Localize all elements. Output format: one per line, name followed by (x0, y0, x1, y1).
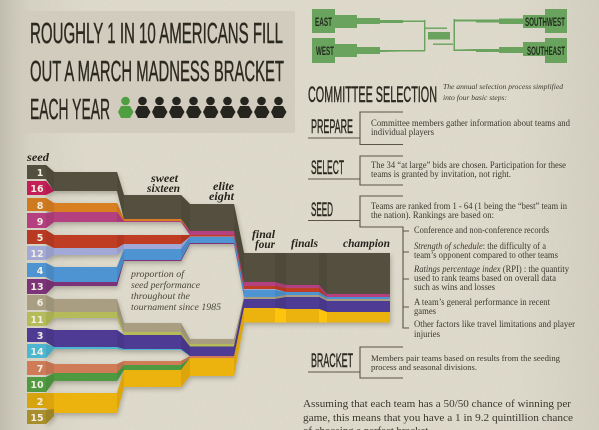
seed boxes: 14 (30, 347, 44, 358)
step: select (308, 156, 566, 185)
bracket diagram (312, 9, 567, 63)
seed boxes: 16 (30, 184, 44, 195)
round labels: four (255, 239, 276, 251)
icon row: 1 in 10 people (118, 97, 286, 118)
intro text: The annual selection process simplified (443, 82, 563, 91)
seed boxes: 2 (37, 397, 43, 408)
round labels: eight (209, 191, 235, 203)
intro text: into four basic steps: (443, 93, 507, 102)
ranking criteria list: Conference and non-conference records (414, 225, 549, 235)
ranking criteria list: injuries (414, 329, 440, 339)
seed boxes: 3 (37, 331, 43, 342)
east arm (312, 9, 425, 33)
round labels (26, 152, 390, 251)
step: seed (308, 196, 575, 339)
seed boxes: 7 (37, 364, 43, 375)
step: seed: Teams are ranked from 1 - 64 (1 being the “best” team in (371, 201, 567, 211)
ranking criteria list: Strength of schedule: the difficulty of a (414, 241, 546, 251)
seed boxes: 11 (30, 315, 44, 326)
closing statement: Assuming that each team has a 50/50 chance of winning per (303, 398, 571, 410)
step: prepare: Committee members gather information about teams and (371, 118, 570, 128)
ranking criteria list: such as wins and losses (414, 282, 495, 292)
seed boxes: 6 (37, 298, 44, 309)
chart caption: tournament since 1985 (131, 303, 221, 313)
connectors and center (424, 19, 455, 51)
chart caption: proportion of (130, 269, 185, 280)
round labels: finals (291, 238, 319, 250)
west arm (312, 38, 425, 63)
region labels (315, 17, 565, 58)
chart caption (130, 269, 221, 313)
chart caption: seed performance (131, 280, 200, 291)
ranking criteria list: used to rank teams based on overall data (414, 273, 556, 283)
intro text (443, 82, 563, 102)
seed boxes: 4 (37, 266, 44, 277)
title text: EACH YEAR (30, 94, 110, 126)
seed boxes: 1 (37, 168, 43, 179)
region labels: EAST (315, 17, 332, 29)
seed boxes: 13 (30, 282, 44, 293)
closing statement (303, 398, 573, 430)
fold shading (46, 165, 327, 424)
round labels: elite (213, 181, 234, 193)
round labels: final (252, 229, 276, 241)
seed boxes: 10 (30, 380, 44, 391)
step: bracket: BRACKET (311, 350, 353, 372)
step: select: SELECT (311, 157, 344, 179)
ranking criteria list: games (414, 306, 436, 316)
round labels: seed (26, 152, 49, 164)
step: prepare: individual players (371, 127, 434, 137)
region labels: SOUTHWEST (525, 17, 565, 29)
flow bands (46, 165, 390, 424)
ranking criteria list: Other factors like travel limitations and player (414, 319, 575, 329)
gold highlight folds (275, 308, 327, 322)
ranking criteria list: A team’s general performance in recent (414, 297, 550, 307)
step: prepare (308, 112, 570, 144)
round labels: sixteen (146, 183, 180, 195)
seed boxes: 8 (37, 201, 44, 212)
text: COMMITTEE SELECTION (308, 82, 437, 107)
step: select: teams is granted by invitation, not right. (371, 169, 511, 179)
southwest arm (454, 9, 567, 33)
title text: ROUGHLY 1 IN 10 AMERICANS FILL (30, 18, 283, 50)
southeast arm (454, 38, 567, 63)
closing statement: game, this means that you have a 1 in 9.2 quintillion chance (303, 412, 573, 424)
region labels: SOUTHEAST (527, 46, 565, 58)
panel: title (22, 11, 295, 133)
step: seed: SEED (311, 199, 333, 221)
chart: seed performance flow (26, 152, 390, 424)
step: prepare: PREPARE (311, 116, 353, 138)
step: bracket: process and seasonal divisions. (371, 363, 477, 372)
step: seed: the nation). Rankings are based on: (371, 210, 494, 220)
ranking criteria list: Ratings percentage index (RPI) : the quantity (413, 264, 569, 274)
seed boxes: 12 (30, 249, 44, 260)
ranking criteria list: team’s opponent compared to other teams (414, 250, 558, 260)
step: bracket: Members pair teams based on results from the seeding (371, 354, 561, 363)
step: bracket (308, 347, 561, 378)
round labels: sweet (150, 173, 179, 185)
step: select: The 34 “at large” bids are chosen. Participation for these (371, 160, 566, 170)
round labels: champion (343, 238, 390, 250)
region labels: WEST (316, 46, 334, 58)
seed boxes: 15 (30, 413, 44, 424)
seed boxes: 5 (37, 233, 43, 244)
ranking criteria list (413, 225, 575, 339)
seed boxes: 9 (37, 217, 43, 228)
seed boxes (27, 165, 46, 424)
title text: OUT A MARCH MADNESS BRACKET (30, 56, 284, 88)
title text (30, 18, 284, 126)
chart caption: throughout the (131, 292, 190, 302)
